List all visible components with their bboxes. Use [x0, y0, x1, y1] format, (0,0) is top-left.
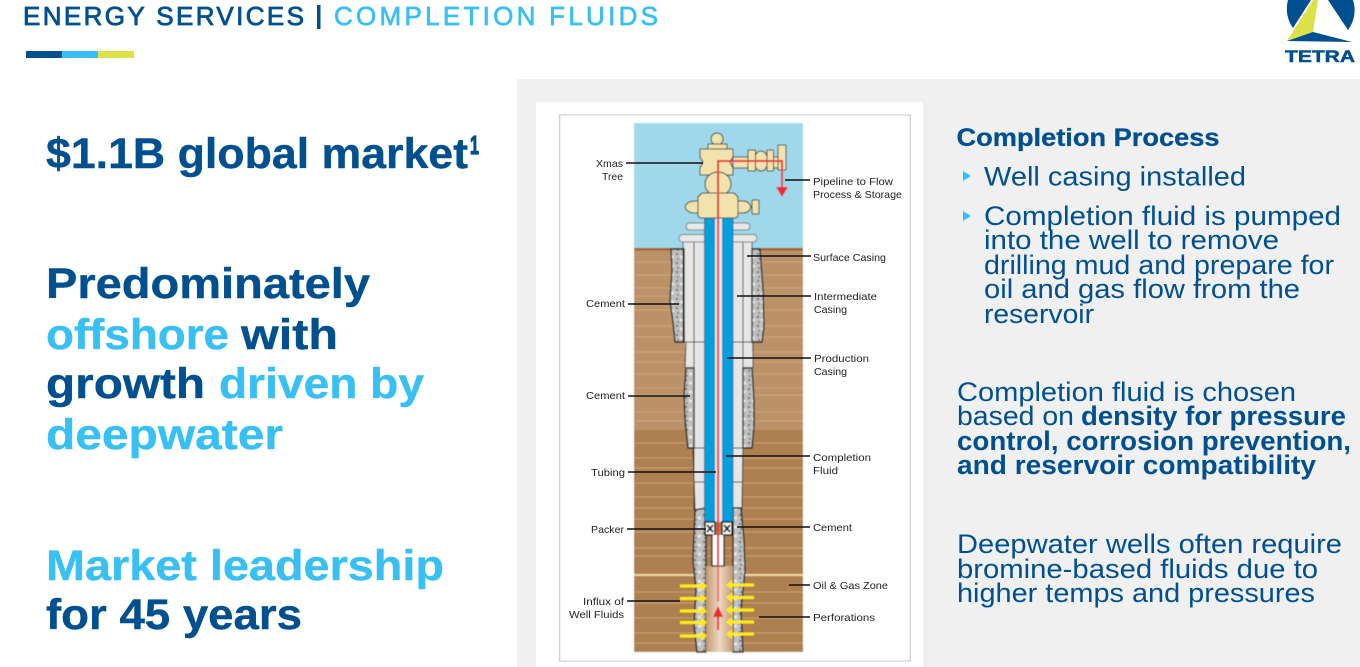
accent bar: [26, 51, 134, 58]
wellbore casing: [683, 240, 753, 510]
red production flow line and arrows: [713, 161, 788, 630]
market leadership statement: for 45 years: [46, 591, 302, 639]
text block: deepwater wells: Deepwater wells often require: [957, 529, 1342, 559]
text block: fluid selection: density for pressure: [1081, 401, 1346, 431]
diagram labels: Oil & Gas Zone: [813, 580, 888, 592]
logo: TETRA: [1285, 0, 1355, 66]
offshore growth statement: [46, 260, 424, 459]
diagram frame: [559, 114, 911, 662]
section heading: Completion Process: [956, 124, 1220, 152]
diagram labels: Tubing: [591, 467, 625, 479]
market size statement: $1.1B global market: [46, 130, 468, 178]
left column: key messages: [46, 130, 479, 639]
leader lines: [626, 163, 811, 617]
bullet: completion fluid: reservoir: [984, 299, 1094, 329]
diagram labels: Fluid: [813, 465, 838, 477]
offshore growth statement: offshore: [46, 311, 229, 359]
diagram labels: Completion: [813, 452, 871, 464]
diagram labels: Cement: [586, 390, 625, 402]
text block: deepwater wells: [957, 529, 1342, 608]
bullet: completion fluid: drilling mud and prepare for: [984, 250, 1334, 280]
diagram labels: Pipeline to Flow: [813, 176, 893, 188]
market leadership statement: Market leadership: [46, 542, 444, 590]
offshore growth statement: deepwater: [46, 411, 283, 459]
well diagram: [559, 114, 911, 662]
panel: grey background: [517, 79, 1360, 667]
tubing strings: [704, 218, 733, 522]
diagram labels: Cement: [813, 522, 852, 534]
text block: fluid selection: based on: [957, 401, 1074, 431]
bullet: completion fluid: Completion fluid is pumped: [984, 201, 1341, 231]
diagram labels: Xmas: [596, 158, 623, 170]
text block: fluid selection: and reservoir compatibility: [957, 450, 1316, 480]
casing head flanges: [679, 223, 757, 242]
diagram labels: Tree: [602, 171, 623, 183]
diagram labels: Packer: [591, 524, 624, 536]
offshore growth statement: with: [240, 311, 338, 359]
well drawing: [559, 114, 911, 662]
diagram labels: Influx of: [583, 596, 624, 608]
market leadership statement: [46, 542, 444, 639]
logo: TETRA: TETRA: [1285, 47, 1355, 66]
diagram labels: Production: [814, 353, 869, 365]
casing lines: [683, 240, 753, 510]
bullet: completion fluid: [963, 201, 1341, 329]
perforation zone: [706, 566, 733, 652]
panel: diagram card: [536, 102, 923, 667]
diagram labels: Process & Storage: [813, 189, 902, 201]
offshore growth statement: driven by: [219, 360, 424, 408]
bullet: completion fluid: into the well to remove: [984, 225, 1279, 255]
cement: [670, 249, 764, 652]
completion process section: [956, 124, 1341, 329]
bullet: completion fluid: oil and gas flow from the: [984, 274, 1300, 304]
header title: COMPLETION FLUIDS: [334, 1, 658, 31]
text block: fluid selection: [957, 377, 1351, 480]
diagram labels: Casing: [814, 366, 847, 378]
offshore growth statement: growth: [46, 360, 205, 408]
offshore growth statement: Predominately: [46, 260, 370, 308]
text block: fluid selection: Completion fluid is chosen: [957, 377, 1296, 407]
header title: ENERGY SERVICES: [23, 1, 304, 31]
diagram labels: Perforations: [813, 612, 875, 624]
diagram labels: Casing: [814, 304, 847, 316]
diagram labels: Surface Casing: [813, 252, 886, 264]
header title: [23, 1, 658, 31]
ground strata: [634, 248, 803, 652]
bullet: well casing: Well casing installed: [984, 162, 1246, 192]
text block: fluid selection: control, corrosion prevention,: [957, 426, 1351, 456]
text block: deepwater wells: bromine-based fluids due to: [957, 554, 1318, 584]
diagram labels: Well Fluids: [569, 609, 624, 621]
diagram labels: [569, 158, 902, 624]
Xmas tree: [685, 133, 786, 218]
yellow influx arrows: [680, 580, 754, 641]
diagram labels: Cement: [586, 298, 625, 310]
text block: deepwater wells: higher temps and pressures: [957, 578, 1315, 608]
sky: [634, 123, 803, 248]
diagram labels: Intermediate: [814, 291, 877, 303]
packer: [705, 522, 732, 566]
market size statement: 1: [470, 130, 479, 160]
